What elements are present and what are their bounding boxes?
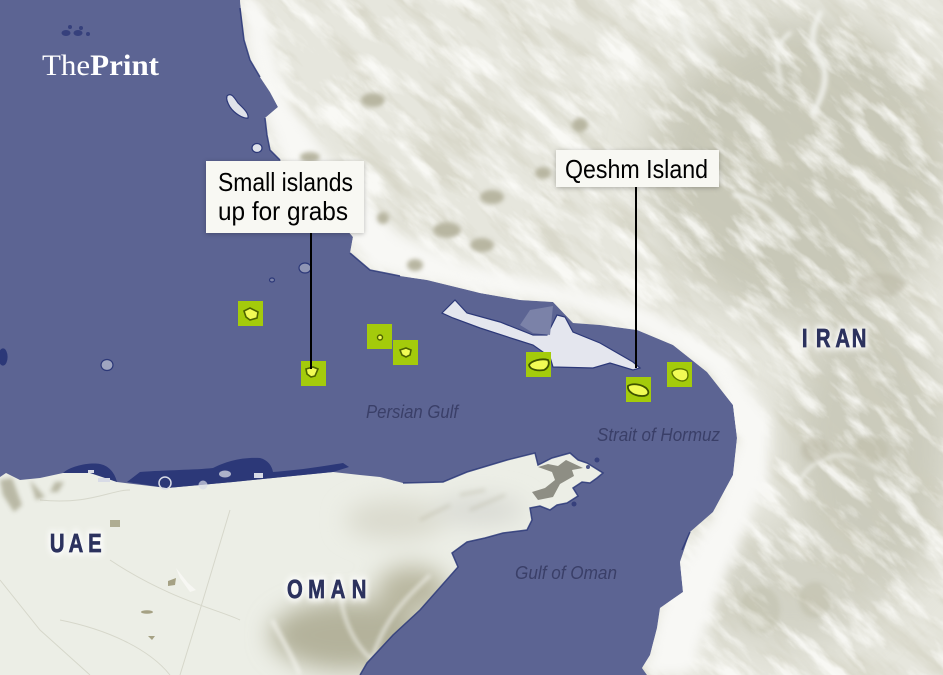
island marker 1 [238,301,263,326]
callout: Small islands up for grabs: up for grabs [218,196,348,226]
country label: IRAN: IRAN [802,324,866,353]
highlighted islands [238,301,692,402]
land: UAE and Oman [0,450,620,675]
rocky Musandam peninsula detail [532,460,583,500]
water label: Persian Gulf: Persian Gulf [366,402,460,422]
leader line: Qeshm Island [635,187,637,368]
ridge streaks running NW to SE [230,0,943,675]
island marker 3 [367,324,392,349]
land: Iran [230,0,943,675]
island marker 6 [626,377,651,402]
artificial islands off Dubai [88,470,263,490]
island marker 2 [301,361,326,386]
olive salt domes [300,93,905,634]
mudflats between Qeshm and the mainland [520,306,553,335]
island marker 7 [667,362,692,387]
country label: IRAN: IRAN [802,324,866,353]
callout: Small islands up for grabs: Small islands [218,167,353,197]
rugged UAE coast shading [0,478,64,512]
Qeshm Island landmass [442,300,640,370]
coastline strokes [240,8,690,675]
water label: Strait of Hormuz: Strait of Hormuz [597,425,720,445]
farms and grey tracks in the desert [110,520,176,640]
island marker 4 [393,340,418,365]
white veins in Oman mountains [272,575,430,675]
callout: Qeshm Island: Qeshm Island [565,154,708,184]
country label: OMAN: OMAN [287,575,366,604]
natural islands [0,95,311,370]
island marker 5 [526,352,551,377]
Oman coastal ridges [420,490,505,520]
dark shallows along the UAE coast [63,458,349,488]
broad tonal regions [650,20,943,650]
white coastal band [240,0,770,675]
country label: UAE: UAE [50,529,102,558]
callout: Small islands up for grabs [206,161,364,233]
salt flats in eastern Iran [683,13,880,480]
country label: UAE: UAE [50,529,102,558]
water label: Gulf of Oman: Gulf of Oman [515,563,617,583]
country label: OMAN: OMAN [287,575,366,604]
logo: ThePrint: ThePrint [42,49,159,82]
dark reef islands at top left [62,25,600,506]
leader line: small islands [310,233,312,369]
